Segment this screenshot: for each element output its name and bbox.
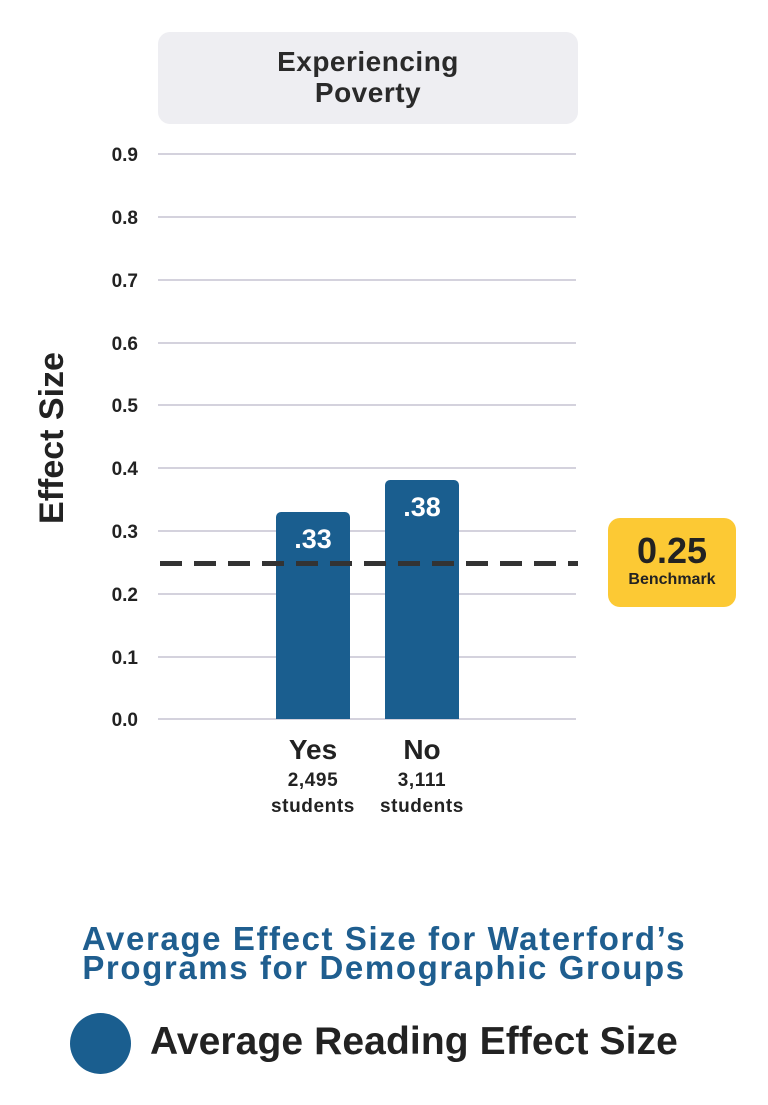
legend [70, 1013, 678, 1074]
chart: gridlines and ticks: 0.6 [112, 334, 138, 355]
x label: No: No [403, 734, 441, 765]
chart: gridlines and ticks: 0.5 [112, 396, 138, 417]
chart: gridlines and ticks: 0.0 [112, 710, 138, 731]
benchmark dashed line [160, 561, 578, 566]
header: Experiencing Poverty: Experiencing [277, 46, 459, 77]
x label: No [380, 734, 464, 817]
legend swatch [70, 1013, 131, 1074]
header: Experiencing Poverty: Poverty [315, 77, 421, 108]
chart: gridlines and ticks: 0.3 [112, 522, 138, 543]
bar: Yes .33 [276, 512, 350, 719]
title: Average Effect Size for Waterford’s [82, 920, 686, 957]
chart: gridlines and ticks: 0.9 [112, 145, 138, 166]
x label: Yes [271, 734, 355, 817]
x label: No: students [380, 796, 464, 817]
benchmark badge [608, 518, 736, 607]
title: Programs for Demographic Groups [82, 949, 686, 986]
x label: Yes: Yes [289, 734, 337, 765]
header: Experiencing Poverty [158, 32, 578, 124]
chart: gridlines and ticks: 0.4 [112, 459, 138, 480]
chart: gridlines and ticks: 0.8 [112, 208, 138, 229]
title [82, 920, 686, 986]
benchmark badge: Benchmark [628, 571, 716, 588]
x label: Yes: 2,495 [288, 770, 338, 791]
chart: gridlines and ticks: 0.2 [112, 585, 138, 606]
chart: gridlines and ticks: 0.7 [112, 271, 138, 292]
x label: No: 3,111 [398, 770, 446, 791]
legend text: Average Reading Effect Size [150, 1020, 678, 1063]
bar: No .38 [385, 480, 459, 719]
bar: No .38: .38 [403, 492, 441, 522]
x label: Yes: students [271, 796, 355, 817]
bar: Yes .33: .33 [294, 524, 332, 554]
y-axis label: Effect Size [33, 352, 71, 524]
chart: gridlines and ticks [112, 145, 576, 731]
benchmark badge: 0.25 [637, 530, 707, 571]
chart: gridlines and ticks: 0.1 [112, 648, 138, 669]
